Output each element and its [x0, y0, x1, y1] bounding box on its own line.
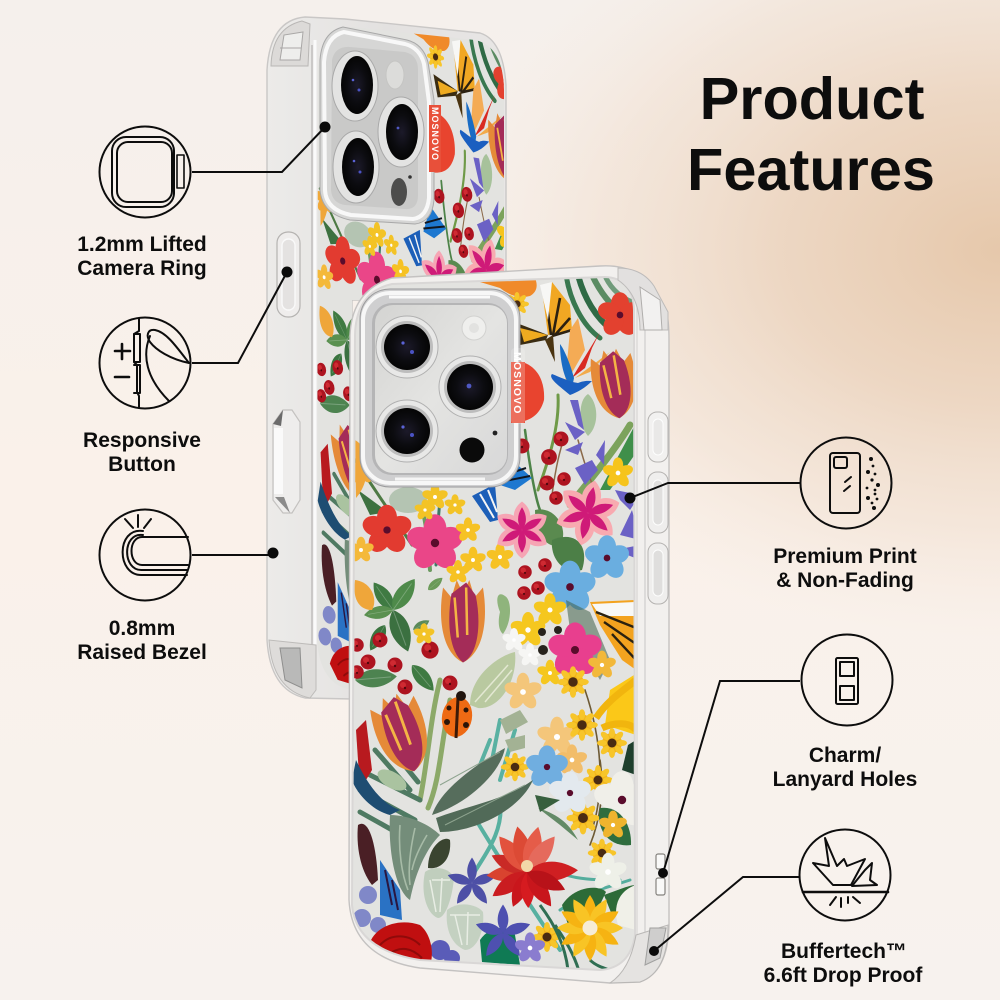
front side button three — [648, 543, 668, 604]
feature: drop proof — [649, 830, 923, 987]
leader line — [192, 548, 278, 558]
feature: raised bezel — [77, 510, 278, 664]
back volume button — [277, 232, 300, 317]
leader line — [192, 122, 330, 172]
feature: premium print — [624, 438, 917, 592]
feature: responsive button — [83, 266, 292, 476]
back case camera — [320, 27, 434, 224]
feature: lanyard holes — [658, 634, 917, 878]
title: Product — [700, 65, 925, 132]
label — [83, 429, 201, 476]
label: Premium Print — [773, 545, 917, 568]
front top-right bumper — [618, 268, 668, 330]
front case camera — [360, 289, 520, 487]
leader line — [649, 877, 799, 956]
icon: button press — [100, 318, 190, 408]
leader line — [658, 681, 800, 878]
icon: raised bezel — [100, 510, 190, 600]
back case brand: MOSNOVO — [430, 107, 440, 161]
front case brand tab: MOSNOVO — [511, 352, 523, 415]
front side button two — [648, 472, 668, 533]
leader line — [192, 266, 292, 363]
leader line — [624, 483, 800, 504]
label: Lanyard Holes — [773, 768, 917, 791]
label — [764, 940, 923, 987]
lanyard holes — [656, 854, 665, 895]
title: Features — [687, 136, 935, 203]
label: Button — [108, 453, 176, 476]
label: & Non-Fading — [776, 569, 914, 592]
front bottom-right bumper — [610, 925, 668, 983]
label: Raised Bezel — [77, 641, 207, 664]
label — [77, 617, 207, 664]
icon: impact burst — [800, 830, 890, 920]
label — [773, 744, 917, 791]
back power button — [273, 410, 300, 513]
front case shell — [349, 266, 669, 983]
front case floral print — [353, 278, 634, 969]
icon: printed phone — [800, 438, 892, 528]
back case shell — [267, 17, 506, 699]
label — [773, 545, 917, 592]
label: 1.2mm Lifted — [77, 233, 207, 256]
front side button one — [648, 412, 668, 462]
icon: camera ring — [100, 126, 190, 218]
back top bumper — [271, 21, 310, 66]
label: Buffertech™ — [781, 940, 907, 963]
label: 0.8mm — [109, 617, 175, 640]
front phone case — [340, 255, 669, 995]
icon: lanyard holes — [802, 634, 892, 726]
title — [687, 65, 935, 203]
back case floral print — [317, 34, 504, 684]
back case brand — [429, 105, 441, 172]
feature: camera ring — [77, 122, 330, 280]
label — [77, 233, 207, 280]
back lower bumper — [269, 640, 316, 698]
label: Camera Ring — [77, 257, 207, 280]
back phone case — [266, 16, 507, 700]
label: Responsive — [83, 429, 201, 452]
label: Charm/ — [809, 744, 881, 767]
label: 6.6ft Drop Proof — [764, 964, 923, 987]
